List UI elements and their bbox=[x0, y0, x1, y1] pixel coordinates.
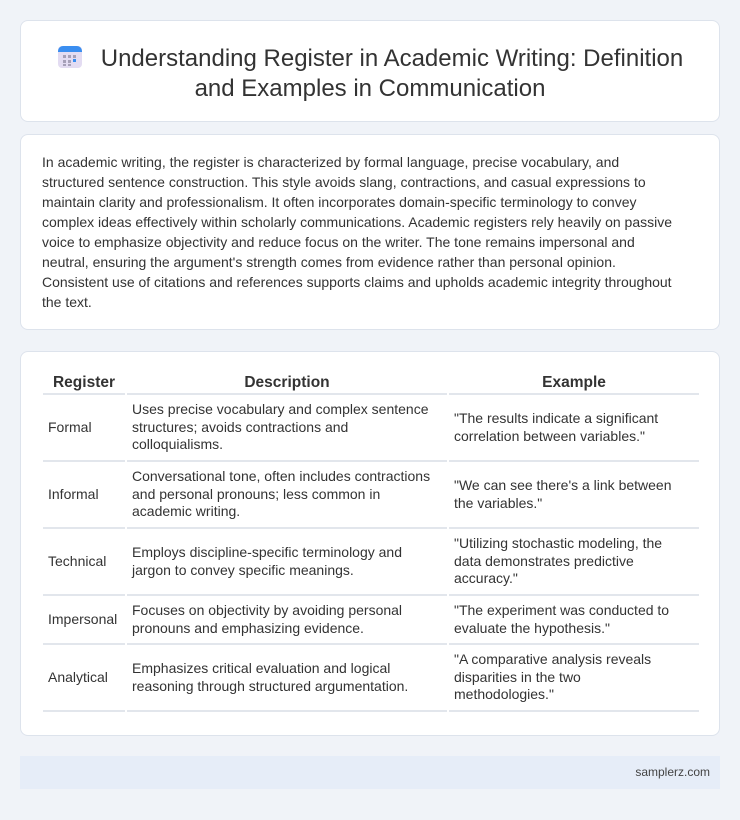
register table: "A comparative analysis reveals disparities in the two methodologies." bbox=[454, 651, 651, 702]
register table: Conversational tone, often includes contractions and personal pronouns; less common in academic writing. bbox=[132, 468, 430, 519]
footer: samplerz.com bbox=[635, 765, 710, 779]
title: Understanding Register in Academic Writing: Definition and Examples in Communication bbox=[101, 45, 683, 102]
register table: Uses precise vocabulary and complex sentence structures; avoids contractions and colloquialisms. bbox=[132, 401, 428, 452]
register table bbox=[43, 374, 699, 712]
register table: Focuses on objectivity by avoiding personal pronouns and emphasizing evidence. bbox=[132, 602, 402, 636]
register table: Example bbox=[542, 374, 606, 391]
register table: Analytical bbox=[48, 669, 108, 685]
register table: Employs discipline-specific terminology and jargon to convey specific meanings. bbox=[132, 544, 402, 578]
register table: "The results indicate a significant correlation between variables." bbox=[454, 410, 658, 444]
footer bbox=[20, 756, 720, 789]
register table: Description bbox=[244, 374, 330, 391]
register table: "We can see there's a link between the variables." bbox=[454, 477, 672, 510]
register table: Impersonal bbox=[48, 611, 117, 627]
header card bbox=[20, 20, 720, 122]
register table: Formal bbox=[48, 419, 92, 435]
register table: Technical bbox=[48, 553, 106, 569]
table panel bbox=[20, 351, 720, 736]
register table: "The experiment was conducted to evaluate the hypothesis." bbox=[454, 602, 669, 636]
intro text panel: In academic writing, the register is characterized by formal language, precise vocabulary, and structured sentence construction. This style avoids slang, contractions, and casual expressions to maintain clarity and professionalism. It often incorporates domain-specific terminology to convey complex ideas effectively within scholarly communications. Academic registers rely heavily on passive voice to emphasize objectivity and reduce focus on the writer. The tone remains impersonal and neutral, ensuring the argument's strength comes from evidence rather than personal opinion. Consistent use of citations and references supports claims and upholds academic integrity throughout the text. bbox=[42, 154, 672, 310]
icon: calendar bbox=[58, 46, 82, 68]
register table: Informal bbox=[48, 486, 99, 502]
register table: Emphasizes critical evaluation and logical reasoning through structured argumentation. bbox=[132, 660, 408, 694]
register table: "Utilizing stochastic modeling, the data demonstrates predictive accuracy." bbox=[454, 535, 662, 586]
register table: Register bbox=[53, 374, 115, 391]
